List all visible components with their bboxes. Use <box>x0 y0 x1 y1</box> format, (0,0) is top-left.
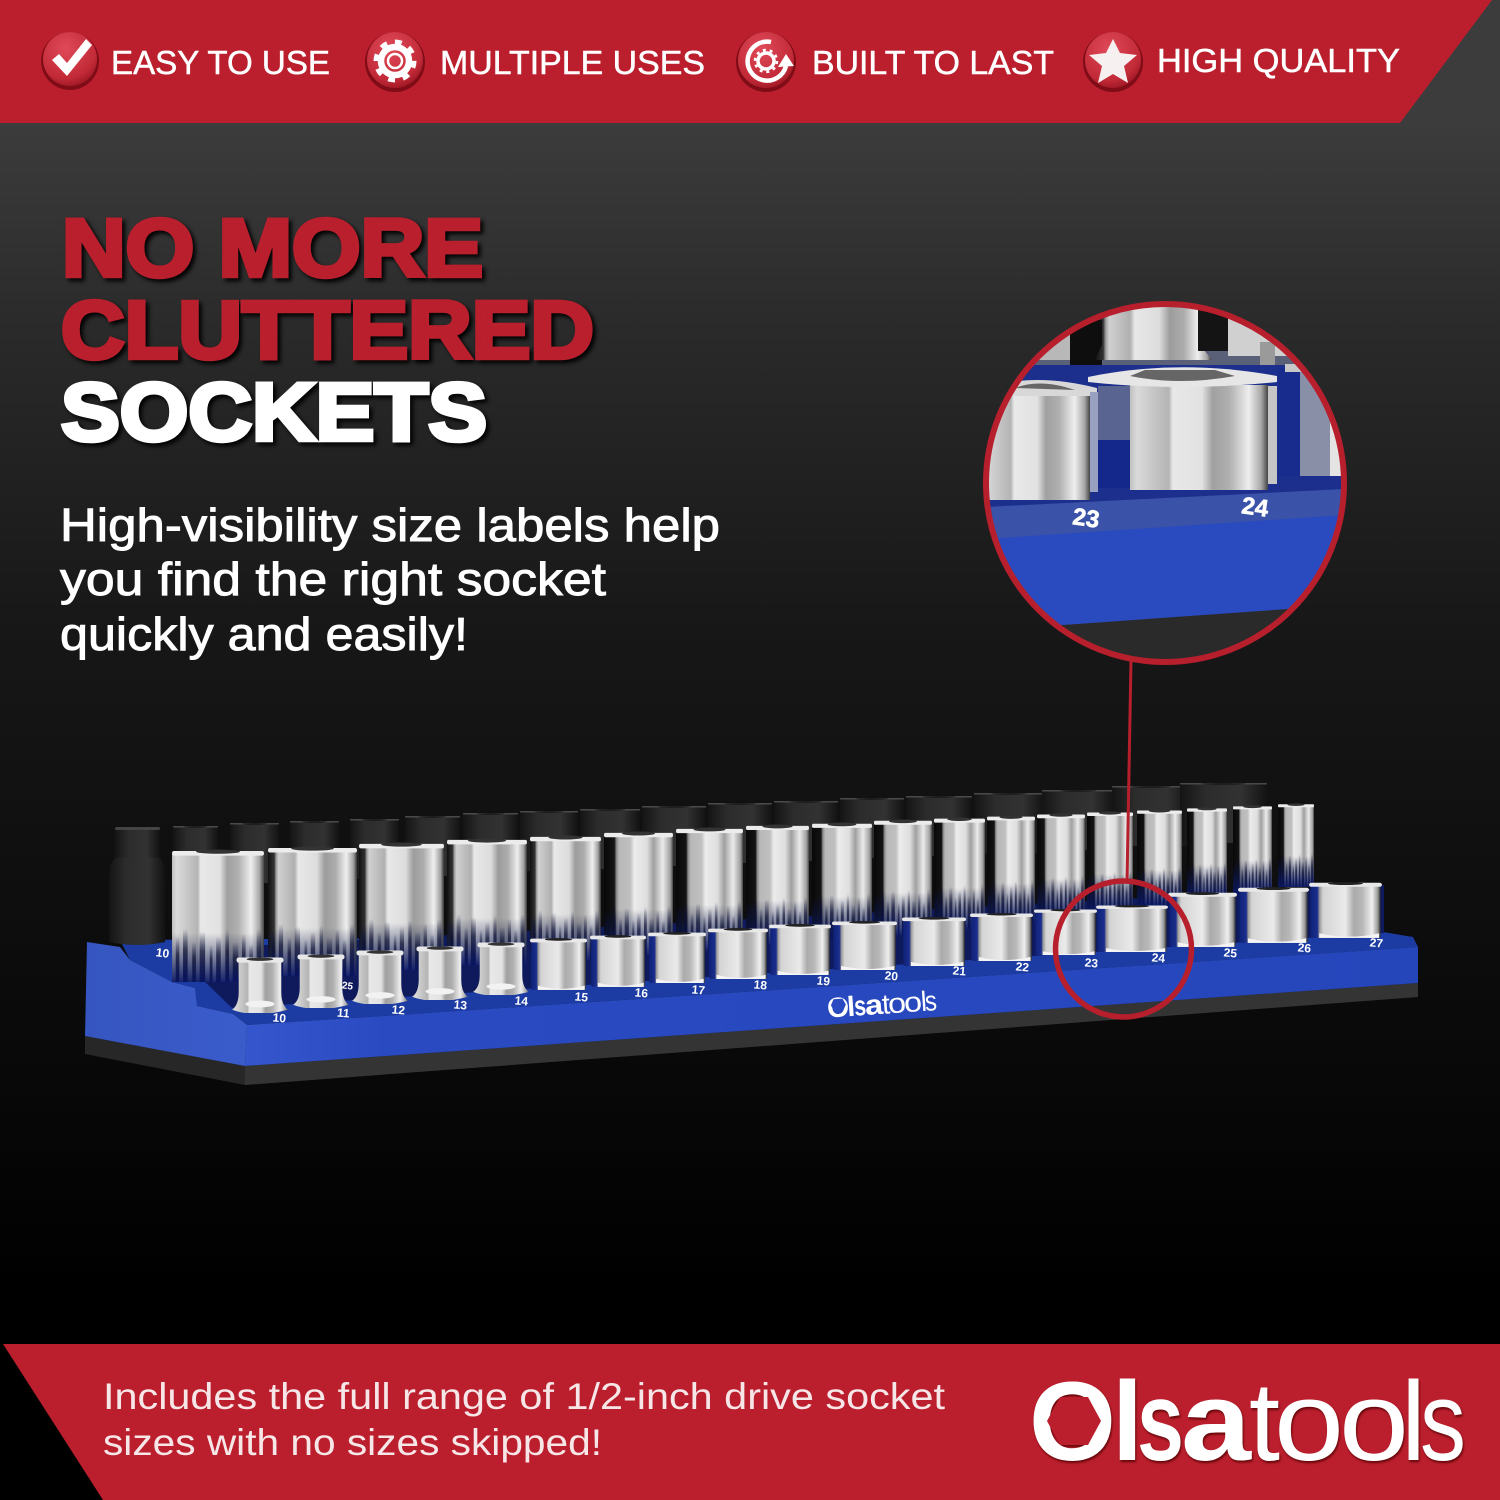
feature: high quality <box>1083 32 1400 92</box>
tray logo: o <box>887 987 907 1019</box>
tray size labels: 13 <box>453 997 468 1013</box>
tray size labels: 20 <box>884 968 899 984</box>
feature: high quality: HIGH QUALITY <box>1157 42 1400 79</box>
tray size labels: 10 <box>155 945 170 961</box>
tray size labels: 11 <box>336 1005 351 1021</box>
magnified upper sockets <box>1034 307 1294 365</box>
tray size labels: 15 <box>574 989 589 1005</box>
tray size labels: 22 <box>1015 959 1030 975</box>
tray size labels: 10 <box>272 1010 287 1026</box>
tray logo: s <box>853 990 867 1022</box>
tray size labels: 17 <box>691 982 706 998</box>
feature: easy to use <box>41 32 330 90</box>
tray size labels: 24 <box>1151 950 1166 966</box>
tray base <box>85 983 1418 1085</box>
footer text <box>103 1376 946 1463</box>
tray logo <box>826 985 938 1024</box>
tray logo: t <box>881 988 891 1020</box>
tray size labels: 25 <box>1223 945 1238 961</box>
feature: multiple uses <box>365 32 705 92</box>
magnified detail circle <box>980 300 1354 670</box>
magnified socket 24 <box>1088 367 1277 490</box>
body text: High-visibility size labels help <box>60 499 720 551</box>
tray size labels: 16 <box>634 985 649 1001</box>
footer text: Includes the full range of 1/2-inch drive socket <box>103 1376 946 1417</box>
body text: quickly and easily! <box>60 608 468 660</box>
tray logo: l <box>920 986 928 1017</box>
footer text: sizes with no sizes skipped! <box>103 1422 602 1463</box>
footer logo <box>1029 1359 1466 1484</box>
headline: SOCKETS <box>61 367 487 458</box>
tray size labels: 27 <box>1369 935 1384 951</box>
headline: NO MORE <box>62 203 483 294</box>
tray size labels: 23 <box>1084 955 1099 971</box>
end black socket <box>109 827 165 945</box>
tray size labels: 18 <box>753 977 768 993</box>
feature: built to last <box>736 32 1054 92</box>
connector line <box>1127 660 1131 882</box>
middle row chrome sockets <box>172 803 1314 982</box>
tray size labels: 14 <box>514 993 529 1009</box>
footer logo: o <box>1339 1359 1409 1484</box>
front row chrome sockets <box>232 882 1382 1014</box>
small highlight circle <box>1056 881 1192 1017</box>
tray size labels: 25 <box>341 980 354 993</box>
magnified size labels: 23 <box>1071 503 1101 534</box>
tray size labels: 26 <box>1297 940 1312 956</box>
footer logo: a <box>1181 1359 1252 1484</box>
tray logo: a <box>864 989 885 1021</box>
footer logo: O <box>1029 1359 1116 1484</box>
tray logo: s <box>924 985 938 1017</box>
body text <box>60 499 720 660</box>
magnified blue reflections <box>985 365 1350 510</box>
tray size labels: 12 <box>391 1002 406 1018</box>
footer logo: o <box>1274 1359 1344 1484</box>
magnified right socket <box>1285 364 1341 476</box>
socket tray product image <box>85 783 1418 1085</box>
tray size labels: 21 <box>952 963 967 979</box>
footer logo: t <box>1249 1359 1280 1484</box>
tray logo: o <box>903 986 923 1018</box>
tray size labels: 19 <box>816 973 831 989</box>
tray size labels <box>155 935 1384 1026</box>
feature: built to last: BUILT TO LAST <box>812 44 1054 81</box>
magnified size labels: 24 <box>1240 492 1271 523</box>
magnified tray strip <box>985 489 1345 540</box>
top banner <box>0 0 1492 123</box>
tray logo: O <box>826 991 850 1024</box>
magnified socket 23 <box>980 380 1098 500</box>
footer logo: s <box>1137 1359 1184 1484</box>
footer banner <box>3 1344 1500 1500</box>
headline <box>61 203 594 458</box>
tray body <box>85 885 1418 1066</box>
magnified size labels <box>1072 497 1268 528</box>
footer logo: s <box>1420 1359 1466 1484</box>
footer logo: l <box>1112 1359 1143 1484</box>
footer logo: l <box>1401 1359 1426 1484</box>
headline: CLUTTERED <box>61 285 594 376</box>
tray logo: l <box>846 991 856 1022</box>
magnified tray face <box>998 516 1338 626</box>
feature: easy to use: EASY TO USE <box>111 44 330 81</box>
back row black sockets <box>173 783 1267 886</box>
feature: multiple uses: MULTIPLE USES <box>440 44 705 81</box>
body text: you find the right socket <box>60 553 606 605</box>
